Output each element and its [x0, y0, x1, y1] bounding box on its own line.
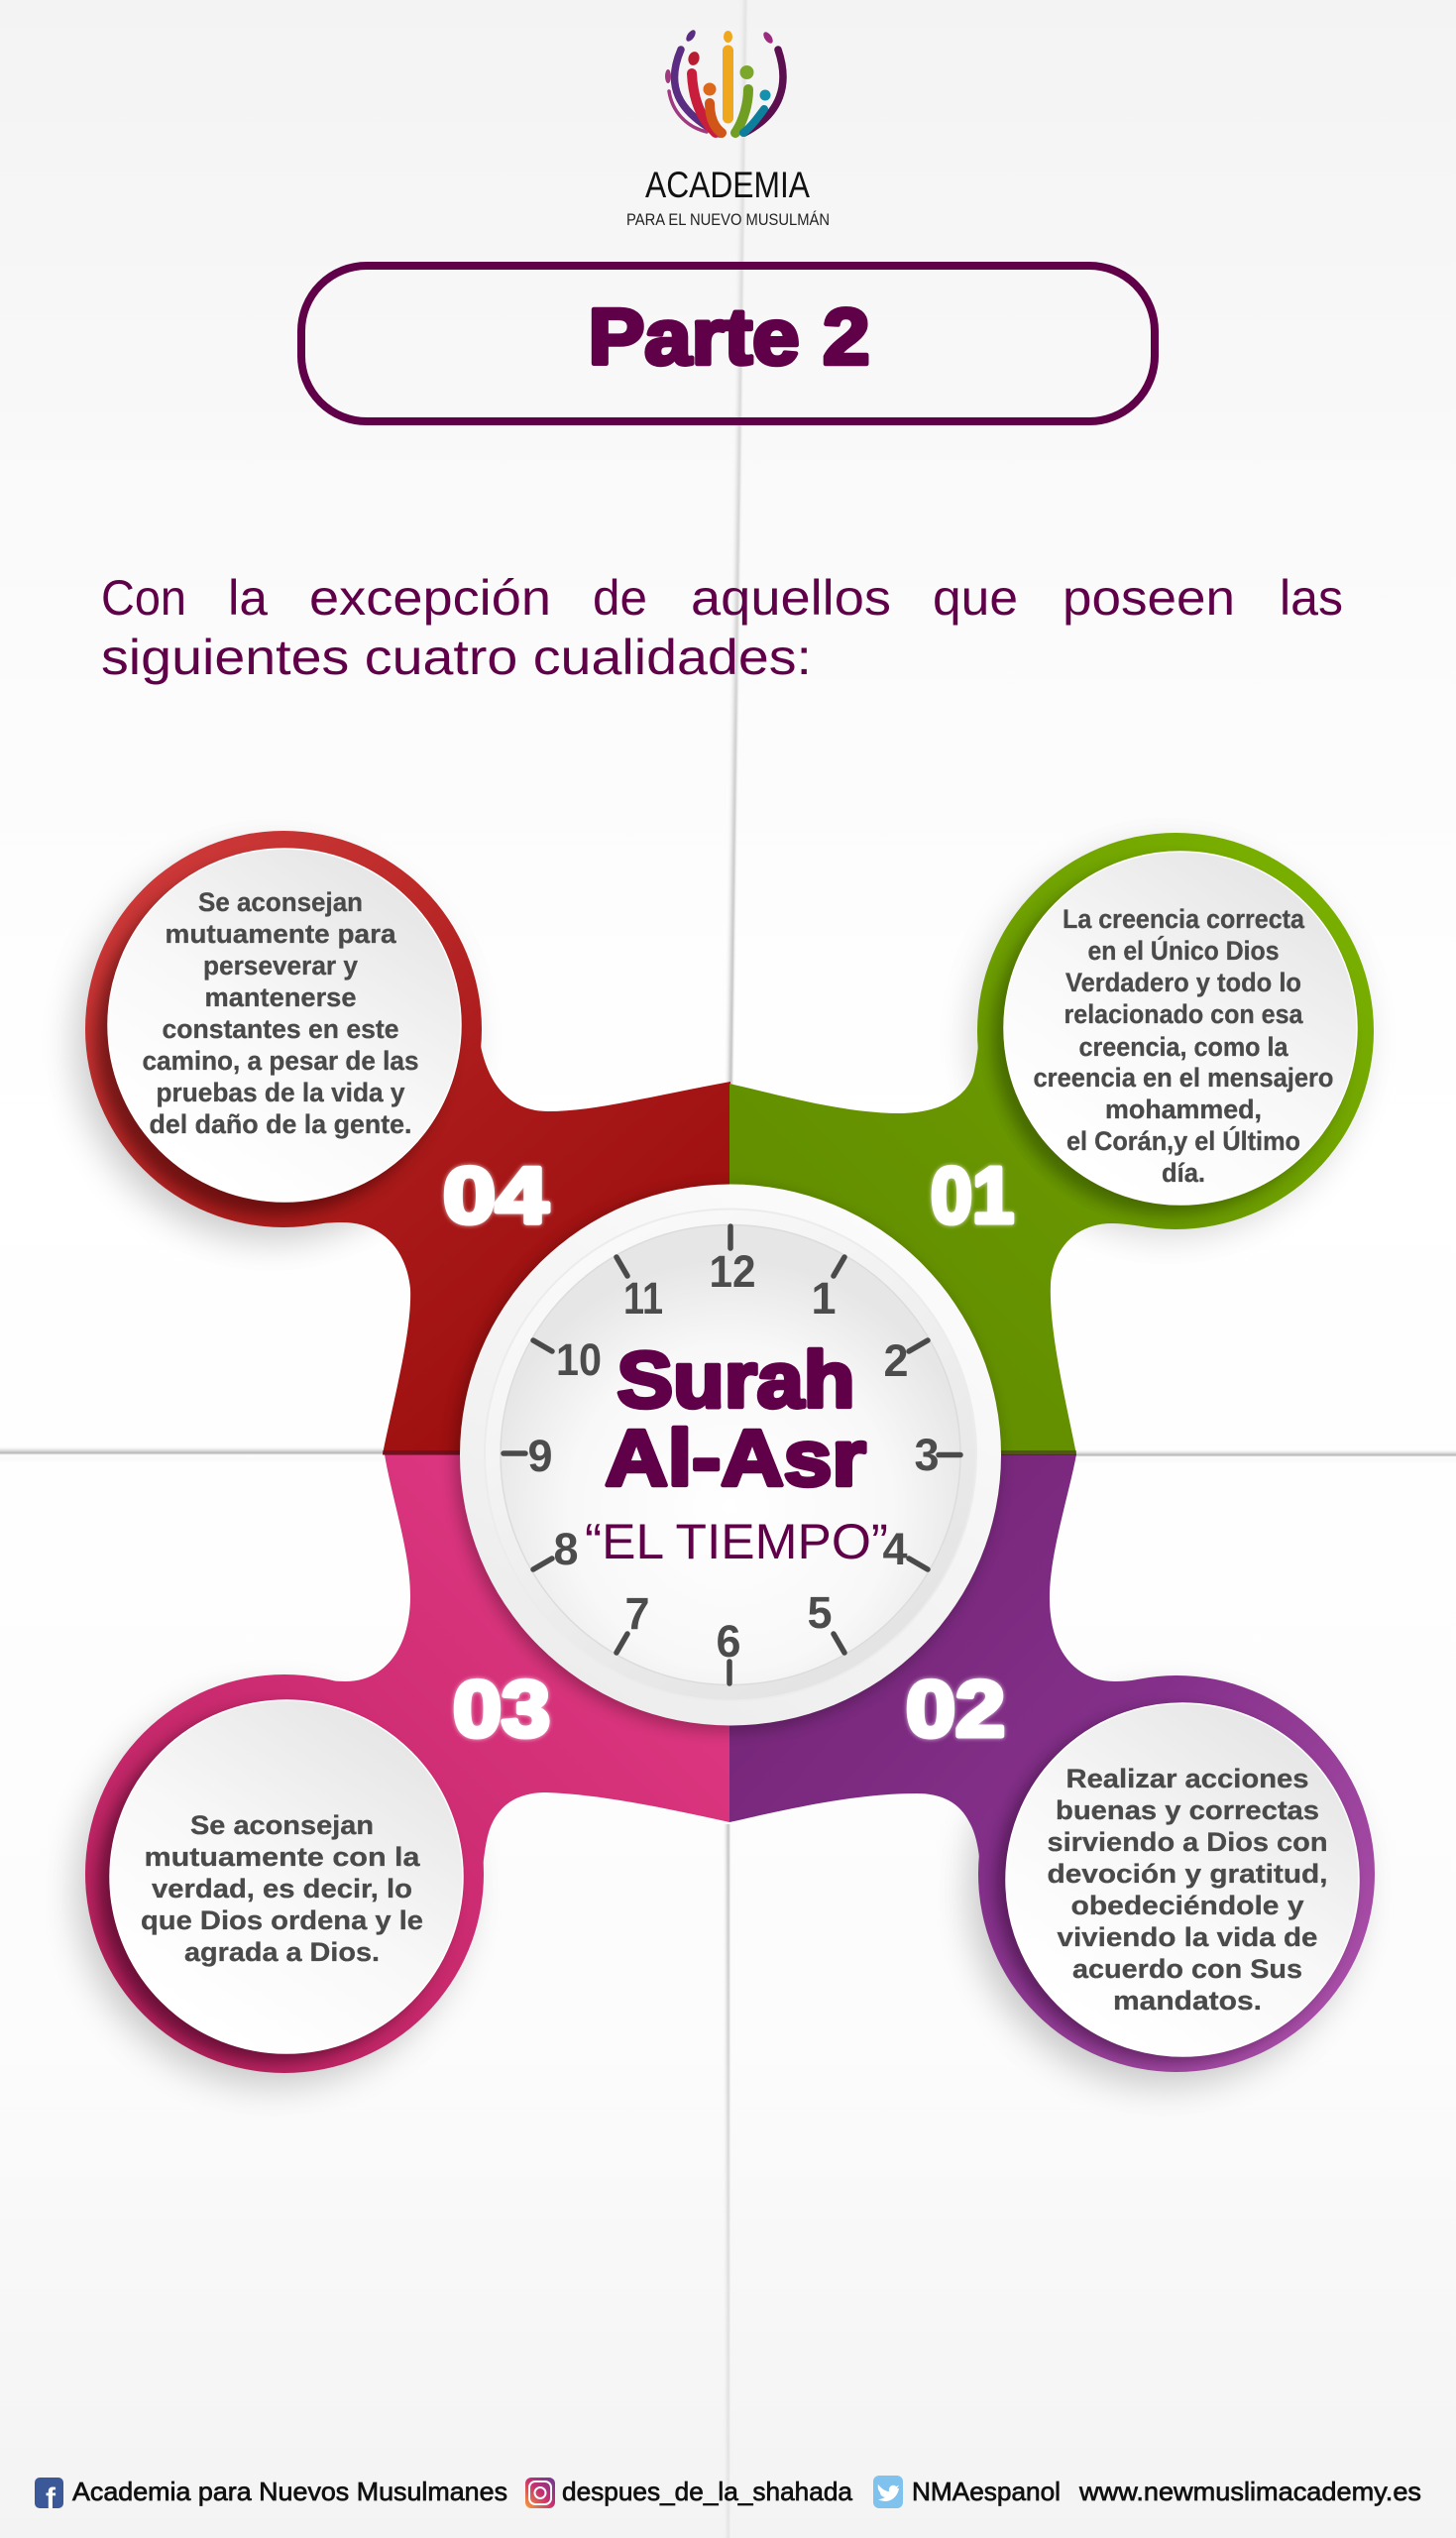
text 04: mantenerse	[204, 982, 357, 1012]
icon: facebook	[35, 2478, 63, 2515]
footer	[35, 2476, 1421, 2515]
clock	[455, 1184, 1001, 1731]
footer text: facebook: Academia para Nuevos Musulmanes	[72, 2477, 507, 2506]
text 04: mutuamente para	[165, 919, 397, 949]
quadrant seam	[383, 1450, 1076, 1455]
text 01: día.	[1162, 1158, 1205, 1188]
text 02: sirviendo a Dios con	[1047, 1827, 1328, 1857]
clock numerals: 7	[624, 1588, 650, 1639]
title text: Parte 2	[589, 292, 870, 381]
panel 01	[729, 833, 1374, 1454]
clock title: Al-Asr: Al-Asr	[605, 1414, 866, 1502]
text 02	[1047, 1764, 1328, 2016]
clock numerals: 11	[623, 1273, 663, 1324]
clock numerals: 3	[914, 1430, 940, 1480]
text disc 03	[110, 1700, 463, 2053]
clock numerals: 8	[553, 1524, 579, 1574]
intro text	[101, 570, 1343, 685]
number 02: 02	[906, 1665, 1005, 1753]
text 02: acuerdo con Sus	[1072, 1954, 1302, 1984]
text 01: La creencia correcta	[1063, 904, 1305, 934]
clock title: Surah: Surah	[616, 1335, 854, 1424]
text 01: relacionado con esa	[1064, 999, 1303, 1029]
title panel: Parte 2	[301, 266, 1155, 421]
text 01: mohammed,	[1105, 1095, 1262, 1124]
text 04: pruebas de la vida y	[157, 1078, 404, 1107]
icon: instagram	[525, 2478, 555, 2508]
panel 02	[729, 1454, 1375, 2086]
icon: twitter	[873, 2476, 903, 2508]
text 01: creencia, como la	[1078, 1032, 1288, 1062]
intro text: siguientes cuatro cualidades:	[101, 630, 812, 685]
text 02: Realizar acciones	[1066, 1764, 1308, 1793]
text disc 04	[108, 849, 461, 1202]
intro text: poseen	[1063, 570, 1235, 626]
text 04: perseverar y	[203, 951, 358, 981]
intro text: de	[593, 570, 647, 626]
intro text: excepción	[309, 570, 551, 626]
text 04: del daño de la gente.	[149, 1109, 412, 1139]
text disc 01	[1004, 852, 1357, 1205]
text 01: en el Único Dios	[1088, 935, 1279, 966]
number 01: 01	[931, 1151, 1014, 1239]
number 04: 04	[443, 1151, 549, 1239]
text 02: viviendo la vida de	[1057, 1922, 1318, 1952]
text 04: camino, a pesar de las	[143, 1046, 418, 1076]
text 03: que Dios ordena y le	[141, 1905, 423, 1935]
clock numerals: 2	[883, 1335, 909, 1386]
footer text: instagram: despues_de_la_shahada	[562, 2477, 853, 2506]
icon: facebook: f	[46, 2482, 56, 2515]
text 03: verdad, es decir, lo	[152, 1874, 412, 1904]
intro text: que	[933, 570, 1018, 626]
intro text: Con	[101, 570, 186, 626]
panel 04	[75, 831, 730, 1454]
text 03: Se aconsejan	[190, 1810, 374, 1840]
clock subtitle: “EL TIEMPO”	[585, 1514, 888, 1569]
clock numerals: 12	[710, 1246, 755, 1297]
footer text: twitter: NMAespanol	[912, 2477, 1061, 2506]
text 04: constantes en este	[163, 1014, 398, 1044]
intro text: las	[1280, 570, 1343, 626]
text 02: obedeciéndole y	[1070, 1891, 1304, 1920]
clock numerals: 4	[882, 1524, 908, 1574]
text 04	[143, 887, 418, 1139]
clock numerals: 5	[807, 1587, 833, 1638]
footer text: website: www.newmuslimacademy.es	[1078, 2477, 1421, 2506]
panel 03	[76, 1454, 729, 2086]
clock numerals: 6	[716, 1616, 741, 1667]
clock numerals: 10	[556, 1334, 602, 1385]
number 03: 03	[453, 1665, 550, 1753]
intro text: la	[228, 570, 268, 626]
text 02: devoción y gratitud,	[1047, 1859, 1328, 1889]
clock numerals: 9	[527, 1431, 553, 1481]
clock ticks	[504, 1226, 960, 1683]
text 01: creencia en el mensajero	[1033, 1063, 1334, 1093]
clock numerals: 1	[811, 1273, 837, 1324]
clock numerals	[527, 1246, 940, 1667]
text 02: buenas y correctas	[1056, 1795, 1319, 1825]
text 04: Se aconsejan	[198, 887, 363, 917]
text 02: mandatos.	[1113, 1986, 1262, 2016]
logo text: ACADEMIA: ACADEMIA	[645, 165, 810, 205]
logo	[626, 29, 830, 229]
text 01: el Corán,y el Último	[1066, 1125, 1300, 1156]
text 01: Verdadero y todo lo	[1065, 968, 1301, 997]
logo subtitle: PARA EL NUEVO MUSULMÁN	[626, 210, 830, 229]
logo mark	[665, 29, 783, 134]
text 03: agrada a Dios.	[184, 1937, 380, 1967]
intro text: aquellos	[691, 570, 891, 626]
text 01	[1033, 904, 1334, 1188]
text 03	[141, 1810, 423, 1967]
text disc 02	[1006, 1703, 1359, 2056]
text 03: mutuamente con la	[145, 1842, 421, 1872]
